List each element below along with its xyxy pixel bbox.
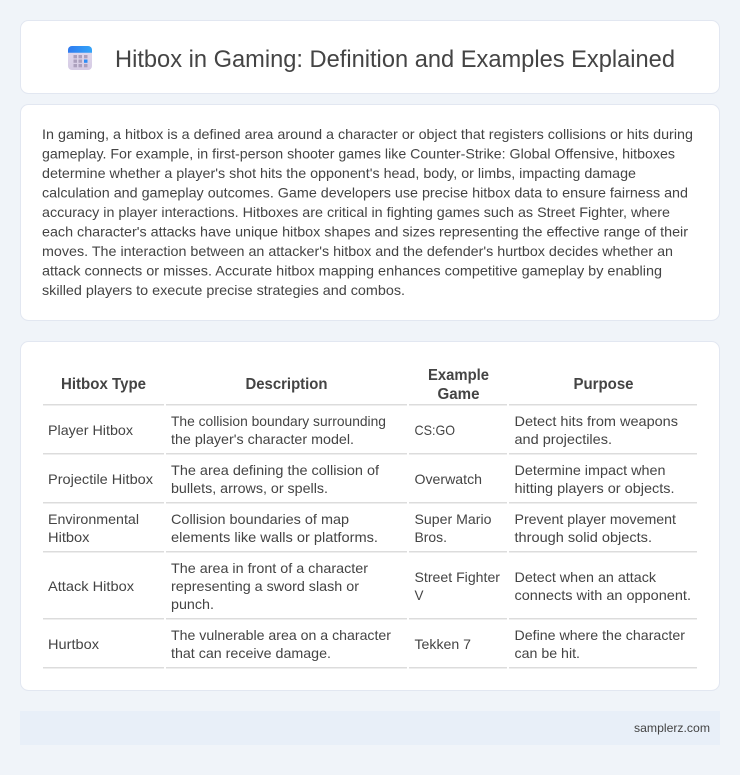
table header row: Game	[438, 386, 480, 403]
row: Attack Hitbox: connects with an opponent.	[514, 587, 691, 603]
row: Hurtbox: Hurtbox	[48, 636, 99, 652]
row: Environmental Hitbox: elements like walls or platforms.	[171, 529, 378, 545]
row: Player Hitbox: Player Hitbox	[48, 422, 133, 438]
row: Attack Hitbox	[48, 560, 691, 612]
row: Environmental Hitbox: Collision boundaries of map	[171, 511, 349, 527]
panel: intro paragraph	[20, 104, 720, 320]
row: Player Hitbox	[48, 413, 678, 447]
row: Environmental Hitbox: through solid objects.	[514, 529, 652, 545]
row: Projectile Hitbox: hitting players or objects.	[514, 480, 674, 496]
row: Environmental Hitbox: Prevent player movement	[514, 511, 676, 527]
table header row: Example	[428, 367, 489, 384]
text block: definition	[42, 126, 693, 298]
row: Projectile Hitbox: The area defining the collision of	[171, 462, 379, 478]
row: Player Hitbox: CS:GO	[414, 422, 455, 438]
row: Attack Hitbox: Attack Hitbox	[48, 578, 134, 594]
row: Projectile Hitbox	[48, 462, 674, 496]
footer bar	[20, 711, 720, 745]
icon: calendar	[68, 46, 92, 70]
row: Attack Hitbox: Detect when an attack	[514, 569, 657, 585]
row: Environmental Hitbox	[48, 511, 676, 545]
table header row: Description	[246, 376, 328, 393]
text block: definition: calculation and gameplay outcomes. Game developers use precise hitbox data to ensure fairness and	[42, 184, 688, 200]
text block: definition: In gaming, a hitbox is a defined area around a character or object that registers collisions or hits during	[42, 126, 693, 142]
row: Projectile Hitbox: Overwatch	[414, 471, 482, 487]
row: Hurtbox: can be hit.	[514, 645, 580, 661]
row: Hurtbox: Define where the character	[514, 627, 685, 643]
text block: definition: each character's attacks have unique hitbox shapes and sizes representing the effective range of their	[42, 224, 688, 240]
text block: definition: moves. The interaction between an attacker's hitbox and the defender's hurtbox decides whether an	[42, 243, 673, 259]
panel: table	[20, 342, 720, 690]
row: Attack Hitbox: representing a sword slash or	[171, 578, 359, 594]
row: Environmental Hitbox: Hitbox	[48, 529, 90, 545]
row: Attack Hitbox: Street Fighter	[414, 569, 500, 585]
table header row	[61, 367, 634, 403]
row: Projectile Hitbox: bullets, arrows, or spells.	[171, 480, 328, 496]
row: Player Hitbox: The collision boundary surrounding	[171, 413, 386, 429]
title: Hitbox in Gaming: Definition and Examples Explained	[115, 46, 675, 73]
row: Hurtbox	[48, 627, 685, 661]
panel: header	[20, 20, 720, 94]
row: Attack Hitbox: V	[414, 587, 424, 603]
row: Hurtbox: Tekken 7	[414, 636, 471, 652]
row: Projectile Hitbox: Determine impact when	[514, 462, 666, 478]
row: Environmental Hitbox: Environmental	[48, 511, 139, 527]
table header row: Hitbox Type	[61, 376, 146, 393]
row: Player Hitbox: and projectiles.	[514, 431, 612, 447]
table header row: Purpose	[574, 376, 634, 393]
row: Projectile Hitbox: Projectile Hitbox	[48, 471, 153, 487]
row: Player Hitbox: Detect hits from weapons	[514, 413, 678, 429]
row: Player Hitbox: the player's character model.	[171, 431, 354, 447]
text block: definition: attack connects or misses. Accurate hitbox mapping enhances competitive gameplay by enabling	[42, 262, 662, 278]
text block: definition: determine whether a player's shot hits the opponent's head, body, or limbs, impacting damage	[42, 165, 636, 181]
text block: definition: accuracy in player interactions. Hitboxes are critical in fighting games such as Street Fighter, where	[42, 204, 670, 220]
row: Hurtbox: The vulnerable area on a character	[171, 627, 391, 643]
row: Environmental Hitbox: Super Mario	[414, 511, 492, 527]
row: Hurtbox: that can receive damage.	[171, 645, 331, 661]
text block: definition: gameplay. For example, in first-person shooter games like Counter-Strike: Global Offensive, hitboxes	[42, 146, 675, 162]
row: Environmental Hitbox: Bros.	[414, 529, 447, 545]
footer text: samplerz.com	[634, 721, 710, 735]
text block: definition: skilled players to execute precise strategies and combos.	[42, 282, 405, 298]
row: Attack Hitbox: punch.	[171, 596, 214, 612]
row: Attack Hitbox: The area in front of a character	[171, 560, 368, 576]
